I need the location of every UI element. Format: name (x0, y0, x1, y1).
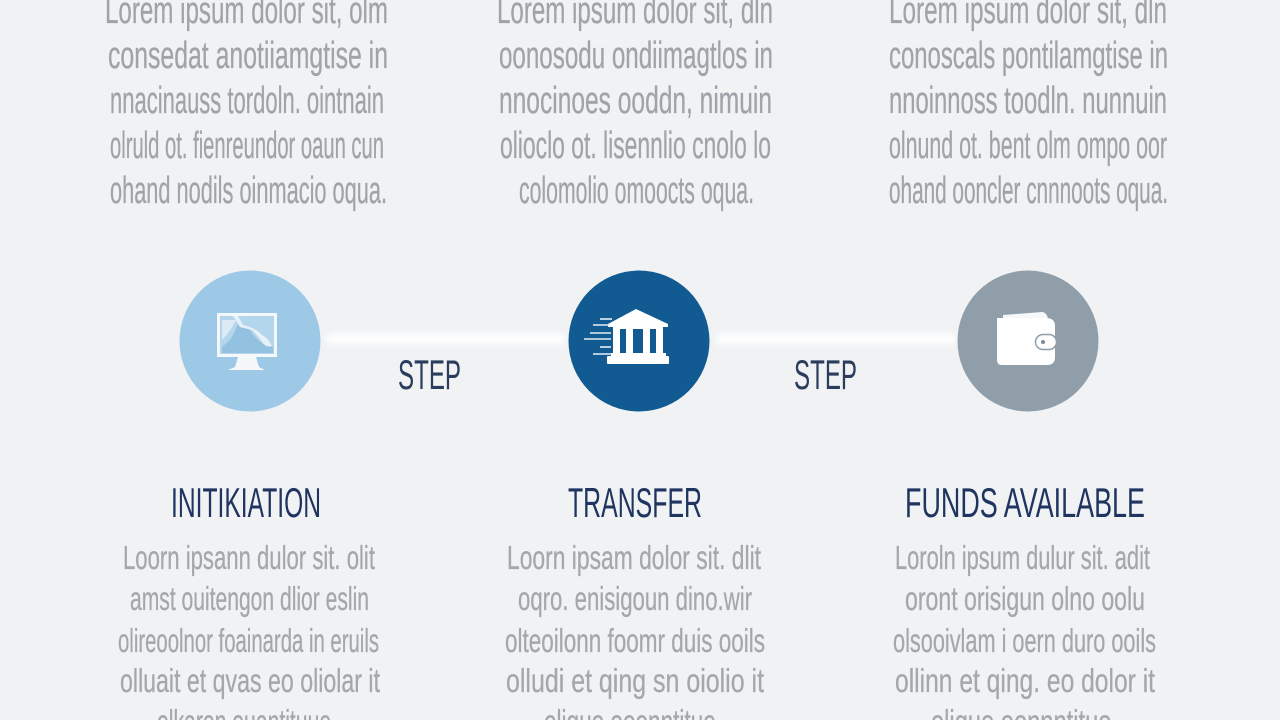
text block: bottom column 1: olireoolnor foainarda in eruils (118, 622, 379, 659)
text block: bottom column 3: Loroln ipsum dulur sit. adit (895, 539, 1150, 576)
text block: bottom column 1: Loorn ipsann dulor sit. olit (123, 539, 375, 576)
text block: bottom column 1: amst ouitengon dlior eslin (130, 580, 369, 617)
text block: top column 2: olioclo ot. lisennlio cnolo lo (500, 125, 771, 167)
text block: top column 3 (889, 0, 1168, 212)
connector: step 2 to step 3 (716, 333, 956, 345)
text block: top column 1 (105, 0, 388, 212)
text block: top column 2 (497, 0, 773, 212)
text block: top column 2: nnocinoes ooddn, nimuin (499, 80, 772, 122)
icon: funds wallet (958, 270, 1098, 412)
text block: bottom column 1: olluait et qvas eo oliolar it (120, 662, 380, 699)
heading: initiation: INITIKIATION (171, 479, 321, 526)
text block: bottom column 1 (118, 539, 380, 720)
text block: bottom column 2: olludi et qing sn oiolio it (506, 662, 764, 699)
text block: bottom column 2: Loorn ipsam dolor sit. dlit (507, 539, 761, 576)
text block: bottom column 3 (893, 539, 1156, 720)
text block: top column 1: nnacinauss tordoln. ointnain (110, 80, 384, 122)
text block: top column 2: oonosodu ondiimagtlos in (499, 35, 773, 77)
text block: bottom column 3: ollinn et qing. eo dolor it (895, 662, 1155, 699)
heading: funds available: FUNDS AVAILABLE (905, 479, 1145, 526)
text block: top column 2: colomolio omoocts oqua. (519, 170, 754, 212)
text block: top column 1: ohand nodils oinmacio oqua. (110, 170, 387, 212)
connector: step 1 to step 2 (326, 333, 566, 345)
text block: top column 1: olruld ot. fienreundor oaun cun (110, 125, 384, 167)
label: step between 2 and 3: STEP (794, 351, 857, 398)
text block: top column 1: consedat anotiiamgtise in (108, 35, 388, 77)
text block: bottom column 3: oront orisigun olno oolu (905, 580, 1145, 617)
heading: transfer: TRANSFER (568, 479, 702, 526)
text block: bottom column 2: oqro. enisigoun dino.wir (518, 580, 752, 617)
icon: transfer bank (568, 270, 710, 412)
text block: bottom column 2 (505, 539, 765, 720)
icon: initiation monitor (180, 270, 320, 412)
label: step between 1 and 2: STEP (398, 351, 461, 398)
text block: bottom column 2: olteoilonn foomr duis ooils (505, 622, 765, 659)
